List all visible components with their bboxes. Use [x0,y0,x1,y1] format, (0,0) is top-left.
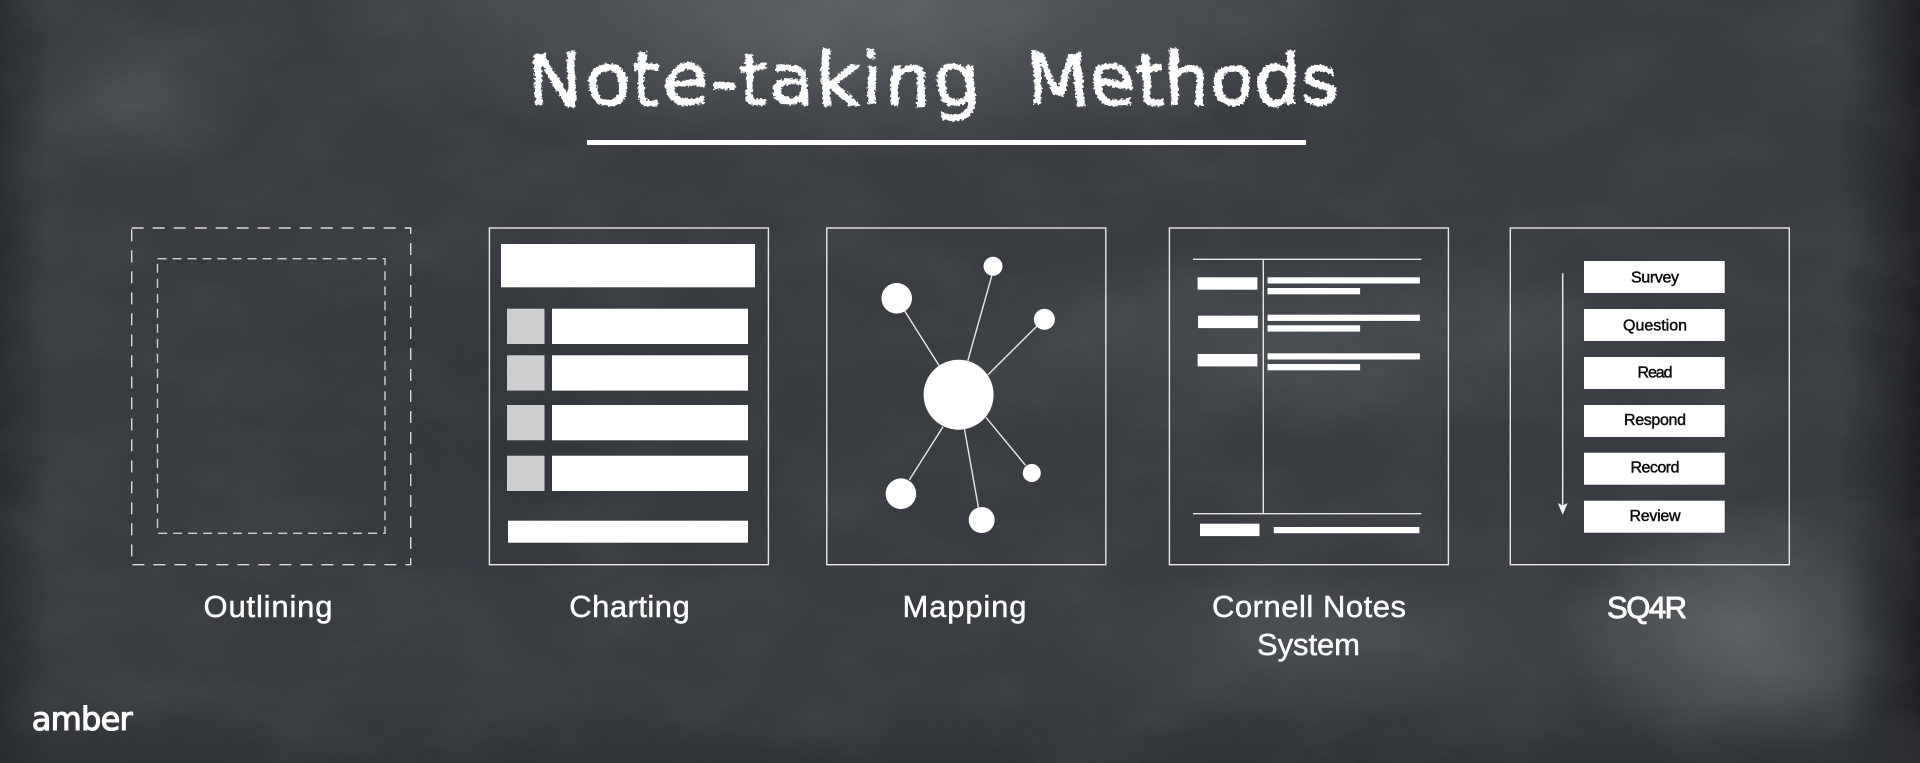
row 3 [507,405,748,440]
logo: amber: amber [32,700,134,738]
step: respond: Respond [1624,412,1686,429]
summary bars [1200,524,1419,536]
connector lines [905,276,1037,507]
footer bar [508,521,748,543]
panel: mapping [827,228,1106,624]
cornell rules [1193,259,1422,514]
step: survey [1584,261,1725,293]
panel: charting [489,228,768,624]
title underline [587,140,1306,145]
cue bars [1198,277,1258,366]
inner dashed frame [158,259,385,533]
central node [924,360,994,430]
label: cornell notes system: Cornell Notes [1212,589,1406,624]
outer nodes [881,257,1055,533]
step: read: Read [1638,364,1672,381]
label: outlining: Outlining [204,589,332,624]
step: record [1584,453,1725,485]
charting frame [489,228,768,565]
title [528,38,1339,122]
label: mapping: Mapping [902,589,1026,624]
arrow [1558,273,1568,515]
label: cornell notes system: System [1257,627,1360,662]
row 1 [507,309,748,344]
step: record: Record [1630,459,1680,476]
mapping frame [827,228,1106,565]
step: question: Question [1623,318,1687,335]
step: survey: Survey [1631,270,1679,287]
panel: outlining [132,228,411,624]
outer dashed frame [132,228,411,565]
note bars [1268,277,1420,370]
label: charting: Charting [569,589,690,624]
step: respond [1584,405,1725,437]
row 2 [507,355,748,391]
step: review [1584,501,1725,533]
panel: sq4r [1510,228,1789,625]
panel: cornell notes system [1169,228,1448,662]
title: Methods [1027,38,1339,122]
label: sq4r: SQ4R [1607,590,1687,625]
title: Note-taking [528,38,979,122]
header bar [501,244,755,287]
sq4r frame [1510,228,1789,565]
step: question [1584,309,1725,341]
row 4 [507,456,748,491]
cornell frame [1169,228,1448,565]
step: review: Review [1630,508,1681,525]
step: read [1584,357,1725,389]
label: cornell notes system [1212,589,1406,662]
